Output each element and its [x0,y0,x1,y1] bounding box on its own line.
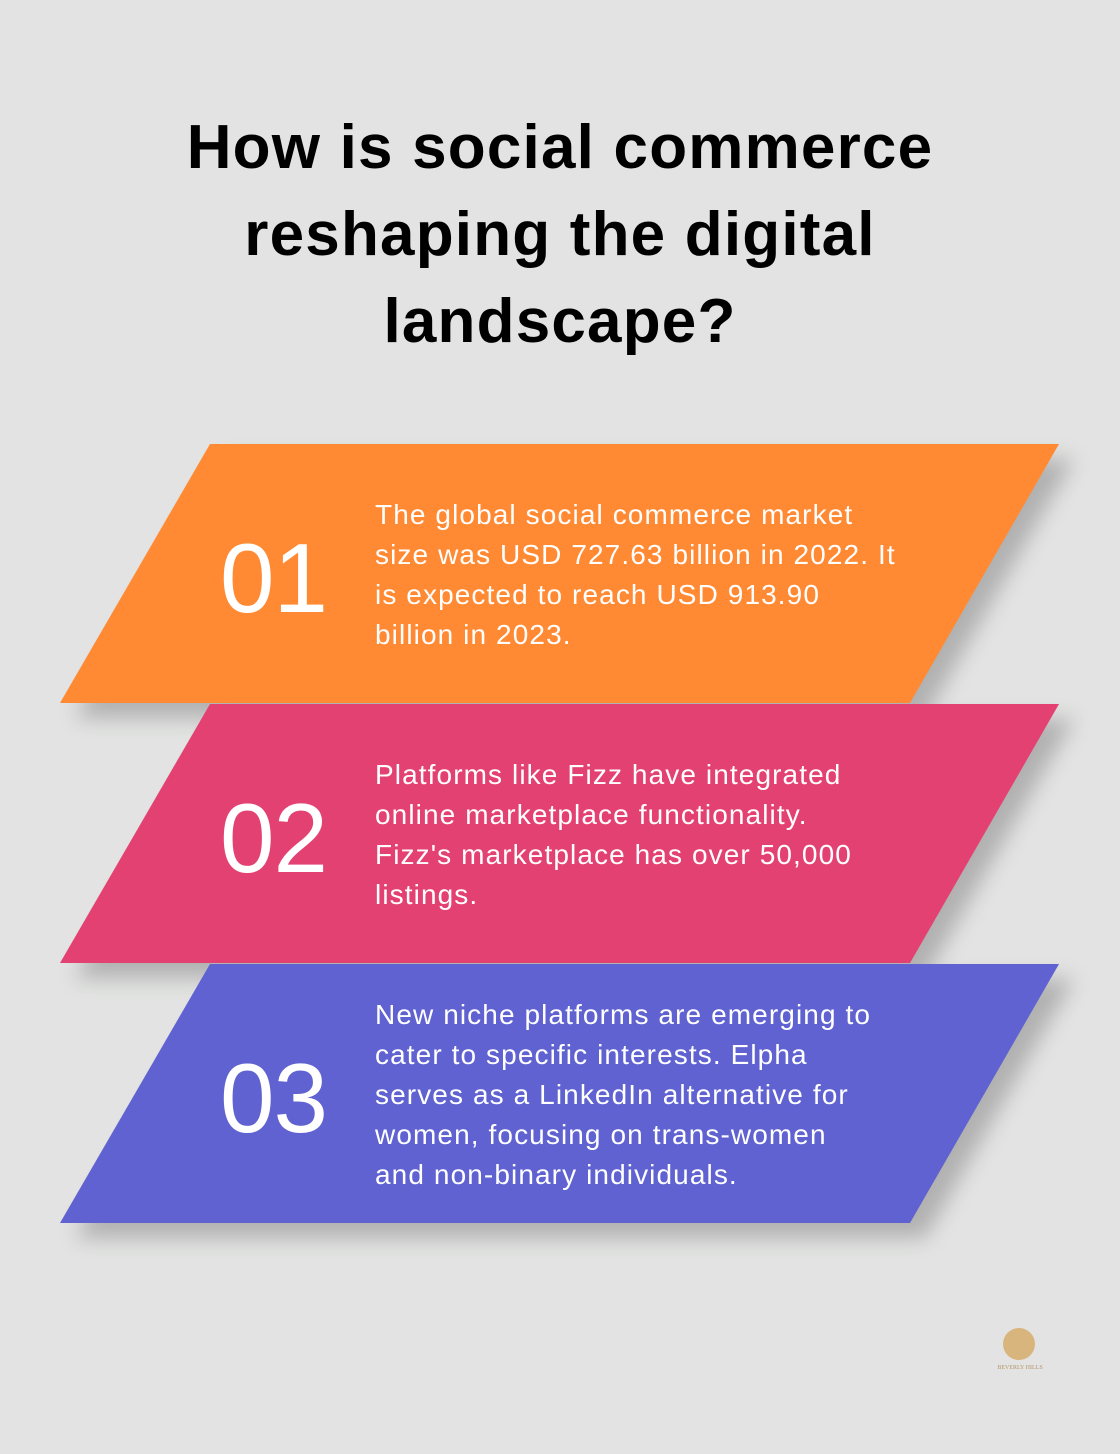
text 1: size was USD 727.63 billion in 2022. It [375,539,896,570]
text 1 [375,499,896,650]
band 1 [60,444,1059,703]
text 1: billion in 2023. [375,619,572,650]
title: landscape? [383,287,737,356]
text 3: cater to specific interests. Elpha [375,1039,808,1070]
title [187,113,933,356]
text 3 [375,999,871,1190]
text 2: listings. [375,879,478,910]
title: reshaping the digital [244,200,876,269]
number 03: 03 [220,1043,327,1153]
number 01: 01 [220,523,327,633]
text 2 [375,759,852,910]
text 3: serves as a LinkedIn alternative for [375,1079,849,1110]
text 1: is expected to reach USD 913.90 [375,579,820,610]
band 3 [60,964,1059,1223]
text 3: and non-binary individuals. [375,1159,738,1190]
text 3: New niche platforms are emerging to [375,999,871,1030]
title: How is social commerce [187,113,933,182]
logo: BEVERLY HILLS [997,1365,1043,1371]
number 02: 02 [220,783,327,893]
text 2: Platforms like Fizz have integrated [375,759,841,790]
text 2: Fizz's marketplace has over 50,000 [375,839,852,870]
band 2 [60,704,1059,963]
text 3: women, focusing on trans-women [375,1119,827,1150]
text 1: The global social commerce market [375,499,853,530]
text 2: online marketplace functionality. [375,799,808,830]
logo [997,1328,1043,1371]
